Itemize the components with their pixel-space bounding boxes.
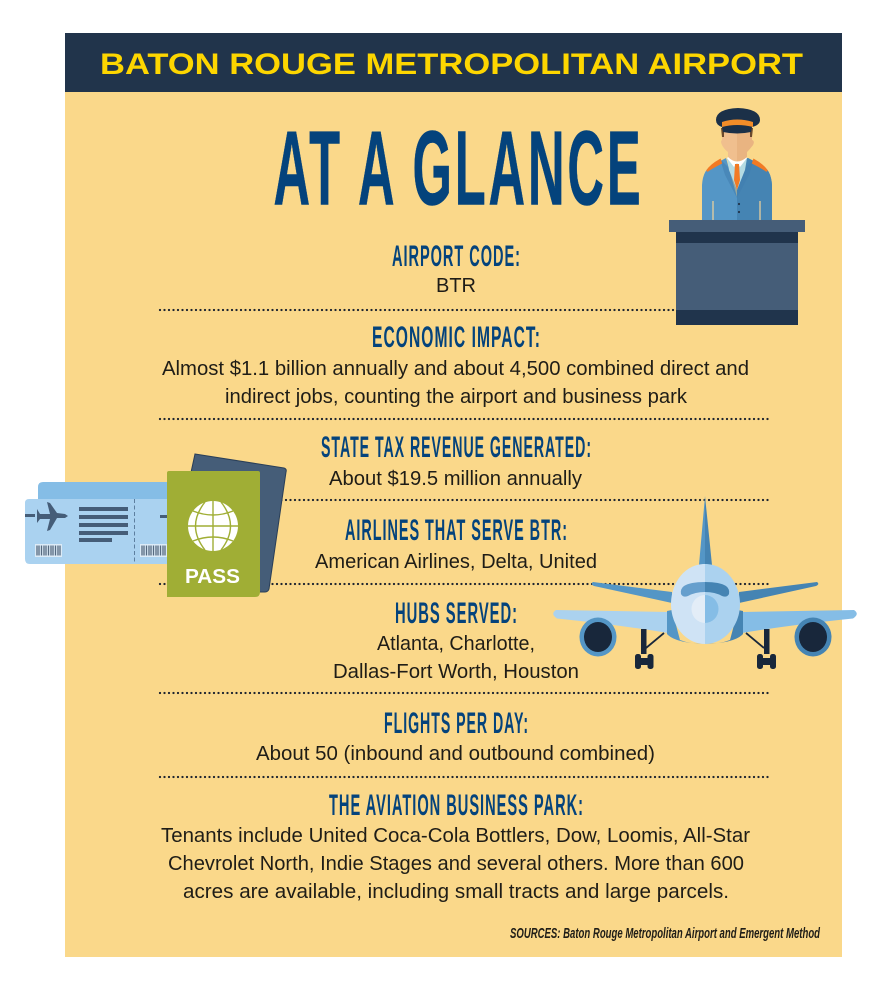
section: airlines: AIRLINES THAT SERVE BTR: [345,514,568,547]
section: economic impact: Almost $1.1 billion annually and about 4,500 combined direct and [162,358,749,380]
section: hubs served: Dallas-Fort Worth, Houston [333,661,579,683]
jacket [702,158,772,220]
text: AIRPORT CODE: [392,240,521,273]
section: aviation business park [161,789,750,903]
wing roots [667,610,705,644]
icon: boarding pass [25,482,168,564]
windscreen [681,582,705,597]
header band [65,33,842,92]
globe [188,501,238,551]
passport front cover [167,471,260,597]
cap [716,108,760,134]
section: economic impact [162,321,749,408]
section: state tax revenue [321,431,592,490]
icon: airplane [553,496,857,669]
section: economic impact: indirect jobs, counting the airport and business park [225,386,688,408]
fuselage [671,564,705,644]
section: airlines [315,514,597,573]
section: flights per day [256,707,655,765]
section: airport code [392,240,521,297]
section: hubs served: HUBS SERVED: [395,597,518,630]
icon: passport [167,454,286,597]
section: flights per day: About 50 (inbound and outbound combined) [256,743,655,765]
section: airport code: BTR [436,275,476,297]
shirt and tie [727,158,747,190]
section: aviation business park: Tenants include United Coca-Cola Bottlers, Dow, Loomis, All-Star [161,825,750,847]
passport back cover [185,454,286,592]
ticket plane glyph [25,502,68,531]
dotted dividers [160,310,769,777]
section: aviation business park: THE AVIATION BUSINESS PARK: [329,789,584,822]
section: hubs served: Atlanta, Charlotte, [377,633,535,655]
wings [553,610,668,633]
ticket front [25,499,168,564]
stabilisers [592,582,672,603]
section: hubs served [333,597,579,683]
podium [669,220,805,232]
section: state tax revenue: About $19.5 million annually [329,468,582,490]
section: flights per day: FLIGHTS PER DAY: [384,707,529,740]
head [721,126,754,162]
section: aviation business park: Chevrolet North, Indie Stages and several others. More than 600 [168,853,744,875]
nose [692,595,705,623]
header title: BATON ROUGE METROPOLITAN AIRPORT [100,48,803,81]
ticket text lines [79,507,168,542]
barcodes [35,544,62,557]
engines [580,618,616,656]
icon: airline agent at podium [669,108,805,325]
section: airlines: American Airlines, Delta, United [315,551,597,573]
epaulettes [707,160,721,171]
tail fin [699,496,705,565]
text: STATE TAX REVENUE GENERATED: [321,431,592,464]
section: economic impact: ECONOMIC IMPACT: [372,321,541,354]
section: aviation business park: acres are available, including small tracts and large parcels. [183,881,729,903]
ticket back [38,482,168,500]
passport label: PASS [185,566,240,588]
landing gear [635,629,776,669]
